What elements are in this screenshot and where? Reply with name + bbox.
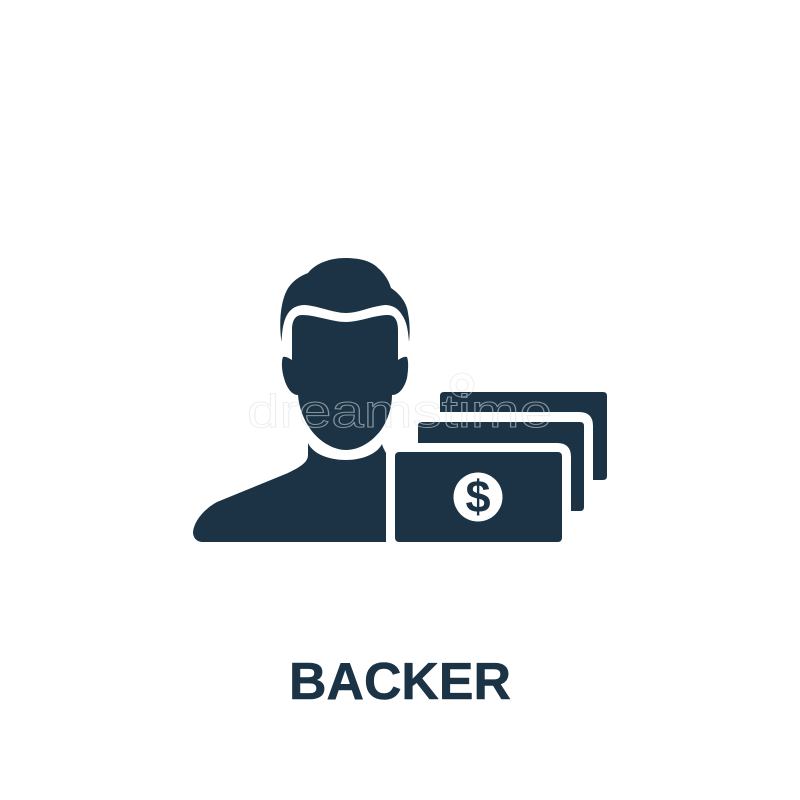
icon: person with money (193, 258, 607, 542)
icon: dollar coin (454, 471, 502, 522)
icon: front banknote (395, 452, 562, 542)
icon: middle banknote (418, 422, 584, 511)
watermark: dreamstime (247, 385, 552, 437)
icon: hair (280, 258, 410, 342)
title: BACKER (289, 653, 511, 711)
watermark (247, 373, 552, 437)
icon: shoulders (193, 443, 386, 542)
icon: dollar coin: $ (465, 471, 491, 522)
icon: back banknote (440, 392, 607, 480)
icon: face (282, 315, 408, 450)
